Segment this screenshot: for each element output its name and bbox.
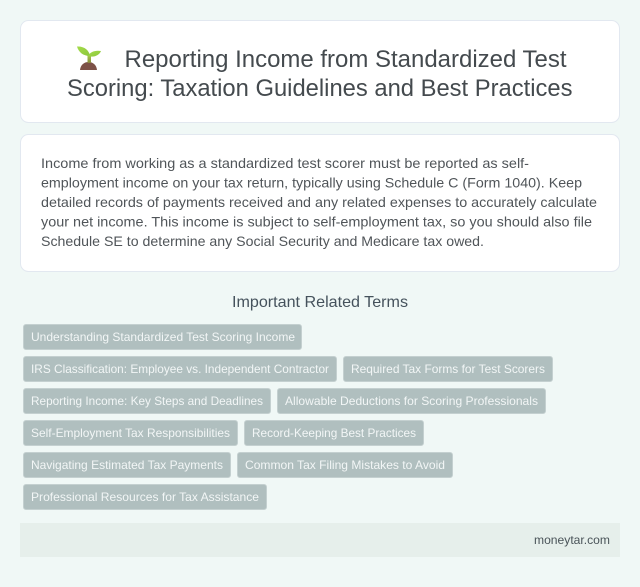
chip [24,452,230,478]
chip [344,356,552,382]
term chips [24,324,552,510]
chip [24,484,266,510]
chip: IRS Classification: Employee vs. Independent Contractor [31,362,329,376]
chip: Common Tax Filing Mistakes to Avoid [245,458,445,472]
description text [41,155,597,249]
title text [67,46,572,102]
chip [24,356,336,382]
footer: moneytar.com [534,533,610,547]
chip [244,420,424,446]
chip: Allowable Deductions for Scoring Professionals [285,394,538,408]
chip [24,420,238,446]
title text: Reporting Income from Standardized Test [124,46,567,73]
description text: Schedule SE to determine any Social Security and Medicare tax owed. [41,233,484,249]
chip [238,452,452,478]
description text: detailed records of payments received and any related expenses to accurately calculate [41,194,597,210]
description text: Income from working as a standardized test scorer must be reported as self- [41,155,529,171]
panel: description [20,134,620,272]
icon: seedling [77,46,101,70]
title text: Scoring: Taxation Guidelines and Best Practices [67,75,572,102]
heading: important related terms: Important Related Terms [232,294,408,311]
chip: Reporting Income: Key Steps and Deadlines [31,394,263,408]
chip: Required Tax Forms for Test Scorers [351,362,545,376]
panel: title header [20,20,620,122]
chip: Navigating Estimated Tax Payments [31,458,223,472]
chip [278,388,546,414]
chip: Record-Keeping Best Practices [252,426,416,440]
description text: your net income. This income is subject to self-employment tax, so you should also file [41,214,592,230]
chip: Understanding Standardized Test Scoring Income [31,330,295,344]
description text: employment income on your tax return, typically using Schedule C (Form 1040). Keep [41,174,582,190]
footer [20,523,620,557]
chip: Self-Employment Tax Responsibilities [31,426,230,440]
chip [24,388,270,414]
chip: Professional Resources for Tax Assistance [31,490,259,504]
chip [24,324,302,350]
